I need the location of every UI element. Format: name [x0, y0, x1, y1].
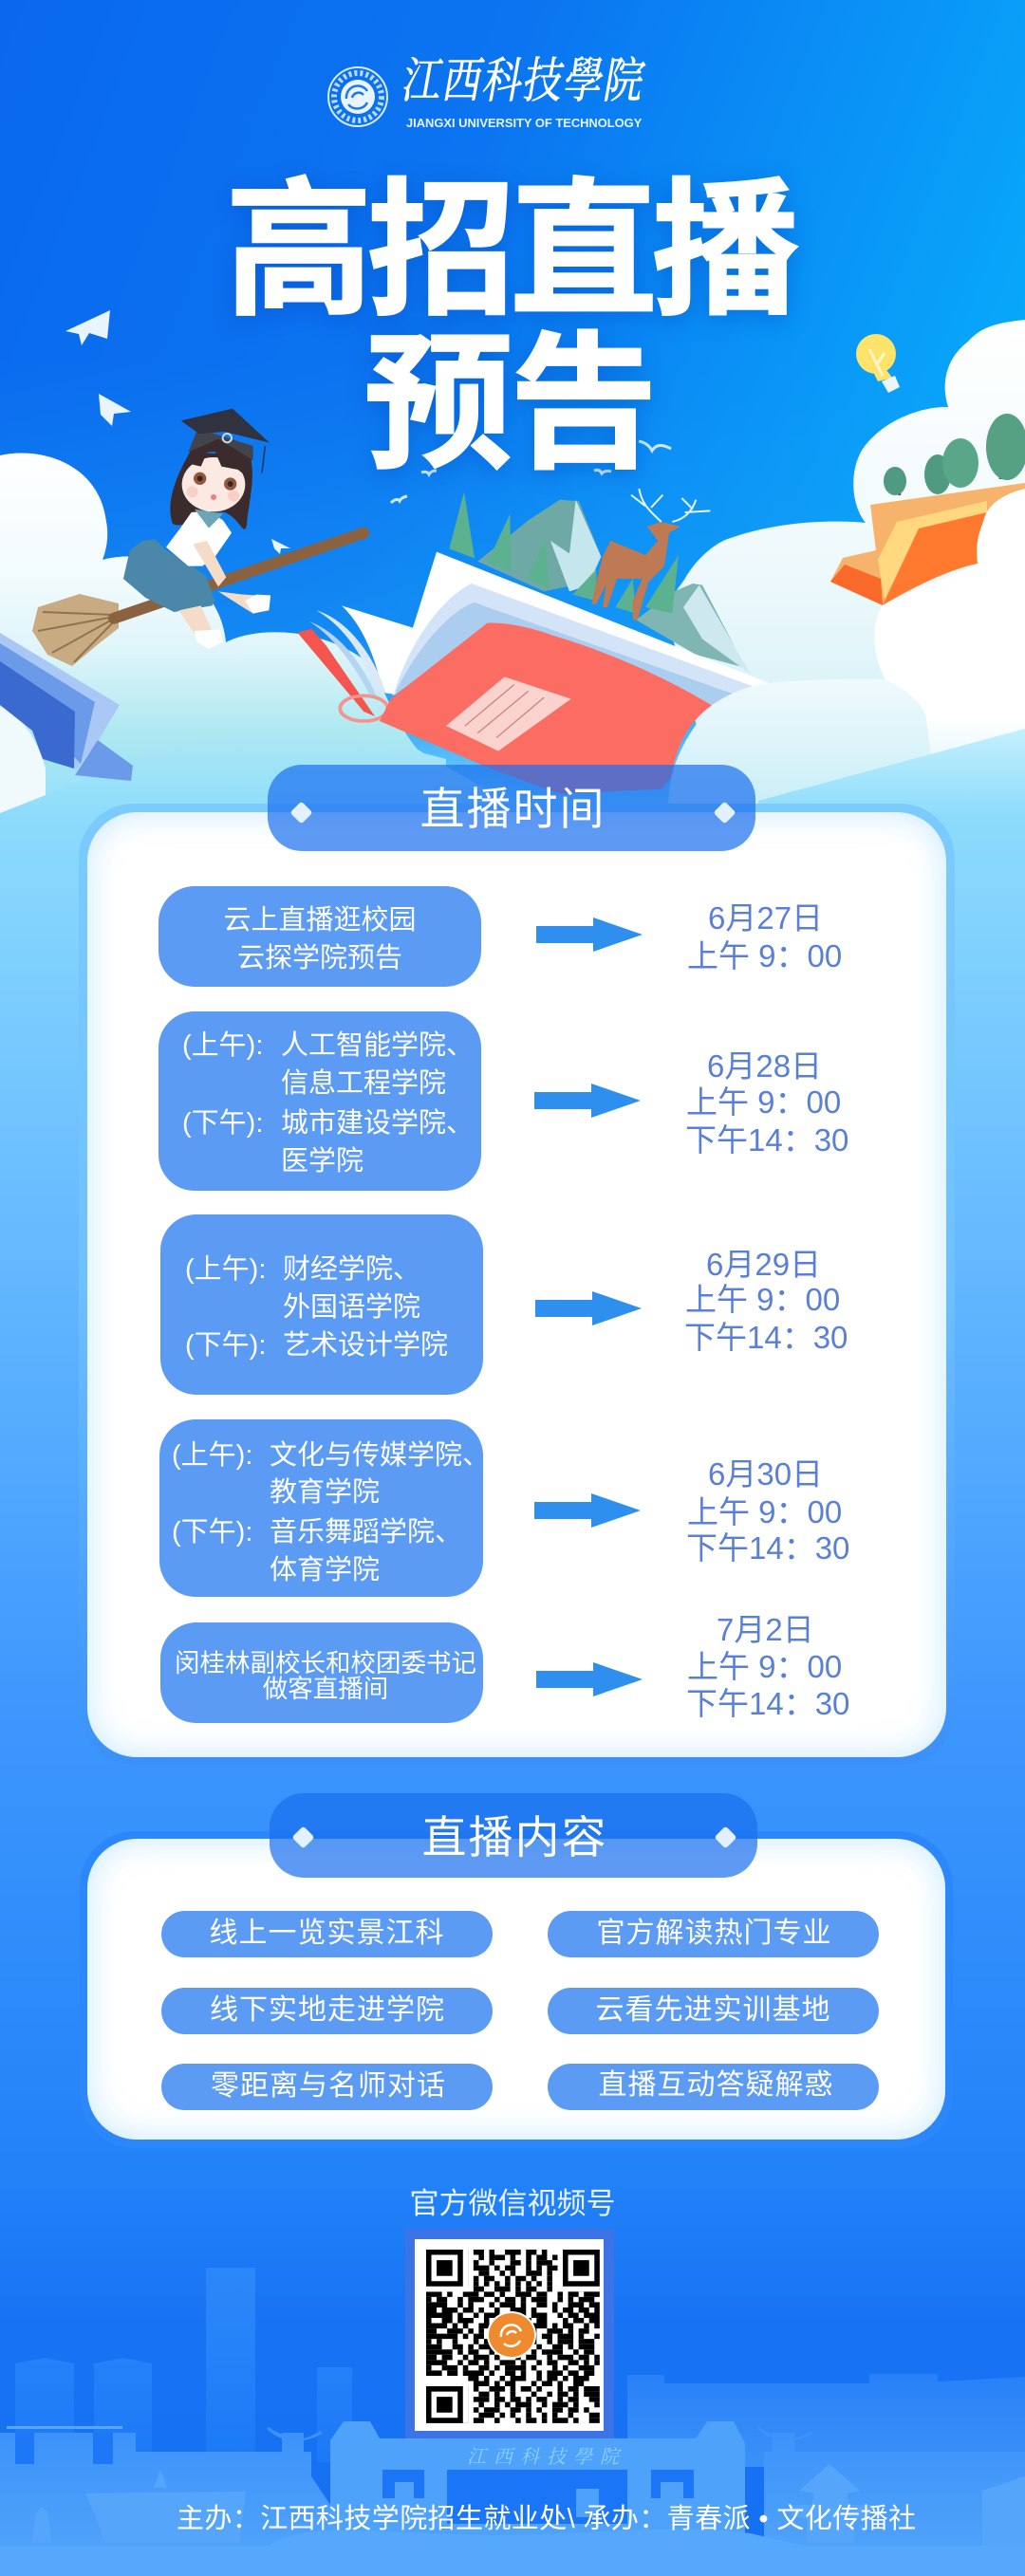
content chip 1: 线上一览实景江科 — [209, 1918, 444, 1949]
cloud: left — [0, 454, 531, 816]
schedule row 4: college pill: 教育学院 — [270, 1477, 380, 1508]
heading: 直播内容: 直播内容 — [421, 1812, 607, 1863]
schedule row 4: college pill: (下午): — [172, 1517, 252, 1547]
content chip 2 — [548, 1911, 879, 1957]
schedule row 5: guest pill — [160, 1622, 483, 1723]
arm — [193, 541, 226, 586]
broom head — [32, 594, 119, 666]
pine trees — [449, 491, 679, 614]
content chip 4 — [548, 1988, 879, 2034]
skirt — [123, 539, 215, 612]
date row 2 — [685, 1048, 848, 1158]
arrow row 3 — [535, 1291, 642, 1325]
shirt — [166, 510, 232, 566]
panel: live content — [87, 1839, 945, 2140]
schedule row 2: college pill: 城市建设学院、 — [281, 1108, 474, 1139]
content chip 4: 云看先进实训基地 — [596, 1994, 831, 2026]
skyline: far right layer — [627, 2374, 1025, 2467]
arrow row 2 — [534, 1084, 641, 1118]
illustration: girl on a broomstick — [32, 409, 363, 666]
diamond left — [289, 801, 313, 825]
illustration: orange book and trees — [830, 414, 1025, 605]
hair — [170, 453, 252, 529]
date row 5 — [686, 1612, 849, 1721]
date row 4 — [686, 1456, 849, 1566]
date row 1 — [687, 900, 842, 973]
date row 4: 6月30日 — [708, 1456, 823, 1492]
title line 1: 高招直播 — [225, 169, 794, 334]
content chip 3: 线下实地走进学院 — [210, 1994, 445, 2026]
date row 4: 下午14：30 — [686, 1530, 849, 1566]
fringe — [187, 438, 253, 476]
logo English name: JIANGXI UNIVERSITY OF TECHNOLOGY — [406, 116, 642, 130]
mountains — [477, 500, 750, 674]
date row 2: 6月28日 — [707, 1048, 822, 1084]
arrow row 5 — [536, 1662, 643, 1696]
schedule row 2: college pill — [158, 1011, 481, 1191]
QR caption: 官方微信视频号 — [410, 2187, 615, 2220]
schedule row 3: college pill: 财经学院、 — [283, 1254, 420, 1285]
face — [182, 457, 245, 511]
schedule row 1: college pill: 云探学院预告 — [237, 943, 402, 973]
schedule row 2: college pill: 信息工程学院 — [281, 1068, 446, 1099]
schedule row 1: college pill — [158, 886, 481, 987]
graduation cap — [188, 429, 253, 460]
date row 5: 下午14：30 — [686, 1686, 849, 1721]
skyline: campus gate — [330, 2421, 745, 2562]
schedule row 3: college pill: 艺术设计学院 — [283, 1330, 448, 1361]
logo: Jiangxi University of Technology — [327, 53, 650, 130]
content chip 2: 官方解读热门专业 — [596, 1918, 831, 1949]
date row 3: 下午14：30 — [684, 1320, 848, 1355]
schedule row 5: guest pill: 做客直播间 — [263, 1675, 388, 1703]
red cover — [380, 622, 712, 794]
schedule row 4: college pill: 体育学院 — [270, 1555, 380, 1585]
legs — [178, 605, 212, 634]
diamond left — [291, 1825, 315, 1849]
diamond right — [714, 1825, 737, 1849]
schedule row 3: college pill: 外国语学院 — [283, 1292, 420, 1323]
arrow row 1 — [536, 917, 643, 952]
icon: light bulb — [856, 334, 900, 393]
gate name: 江西科技學院 — [467, 2447, 626, 2468]
heading: 直播时间 — [268, 765, 755, 851]
illustration: blue open book — [0, 633, 133, 813]
icon: paper planes — [65, 310, 290, 554]
content chip 6 — [548, 2064, 879, 2110]
cloud: right rear — [664, 320, 1025, 816]
schedule row 2: college pill: (下午): — [182, 1108, 263, 1139]
cover label — [446, 676, 571, 751]
schedule row 2: college pill: 医学院 — [281, 1146, 363, 1177]
date row 1: 上午 9：00 — [687, 938, 842, 973]
schedule row 4: college pill: 音乐舞蹈学院、 — [270, 1517, 462, 1547]
heading: 直播时间: 直播时间 — [419, 784, 606, 834]
logo emblem — [327, 66, 388, 127]
date row 1: 6月27日 — [708, 900, 823, 936]
cloud: right front — [874, 489, 1025, 816]
schedule row 4: college pill — [159, 1419, 483, 1597]
content chip 6: 直播互动答疑解惑 — [598, 2069, 833, 2101]
panel: live content outer frame — [80, 1831, 953, 2148]
date row 3: 上午 9：00 — [685, 1282, 840, 1317]
date row 5: 7月2日 — [717, 1612, 814, 1647]
pages — [392, 552, 769, 712]
schedule row 1: college pill: 云上直播逛校园 — [223, 905, 416, 936]
diamond right — [713, 801, 736, 825]
skyline: middle layer — [0, 2427, 1025, 2562]
date row 4: 上午 9：00 — [687, 1494, 842, 1529]
arrow row 4 — [534, 1493, 641, 1528]
skyline: far layer — [15, 2268, 352, 2467]
schedule row 3: college pill — [160, 1214, 483, 1395]
content chip 3 — [161, 1988, 493, 2034]
schedule row 3: college pill: (上午): — [185, 1254, 266, 1285]
panel: live schedule outer frame — [79, 804, 955, 1765]
title line 2: 预告 — [364, 323, 655, 488]
date row 3 — [684, 1247, 848, 1355]
QR code — [405, 2229, 614, 2438]
illustration: open book with mountains and deer — [297, 489, 769, 794]
schedule row 2: college pill: 人工智能学院、 — [281, 1030, 474, 1061]
schedule row 4: college pill: 文化与传媒学院、 — [270, 1440, 490, 1471]
skyline: pavilion and low buildings — [32, 2464, 1025, 2546]
date row 2: 下午14：30 — [685, 1122, 848, 1158]
content chip 5: 零距离与名师对话 — [211, 2070, 446, 2102]
content chip 1 — [161, 1911, 493, 1957]
schedule row 3: college pill: (下午): — [185, 1330, 266, 1361]
schedule row 4: college pill: (上午): — [172, 1440, 252, 1471]
birds — [391, 441, 671, 503]
date row 2: 上午 9：00 — [686, 1084, 841, 1120]
red ribbon — [297, 629, 375, 716]
panel: live schedule — [87, 812, 946, 1757]
deer — [591, 489, 710, 620]
schedule row 5: guest pill: 闵桂林副校长和校团委书记 — [175, 1649, 476, 1677]
footer organisers: 主办：江西科技学院招生就业处\ 承办：青春派 • 文化传播社 — [177, 2504, 916, 2534]
cloud: centre-right front over book — [668, 679, 1025, 816]
broomstick — [114, 533, 363, 619]
heading: 直播内容 — [270, 1793, 757, 1878]
schedule row 2: college pill: (上午): — [182, 1030, 263, 1061]
date row 5: 上午 9：00 — [687, 1649, 842, 1684]
skyline: front hills — [0, 2530, 1025, 2576]
date row 3: 6月29日 — [706, 1247, 821, 1282]
skyline: roof bar — [7, 2426, 122, 2464]
logo script name: 江西科技學院 — [399, 53, 650, 108]
content chip 5 — [161, 2064, 493, 2110]
